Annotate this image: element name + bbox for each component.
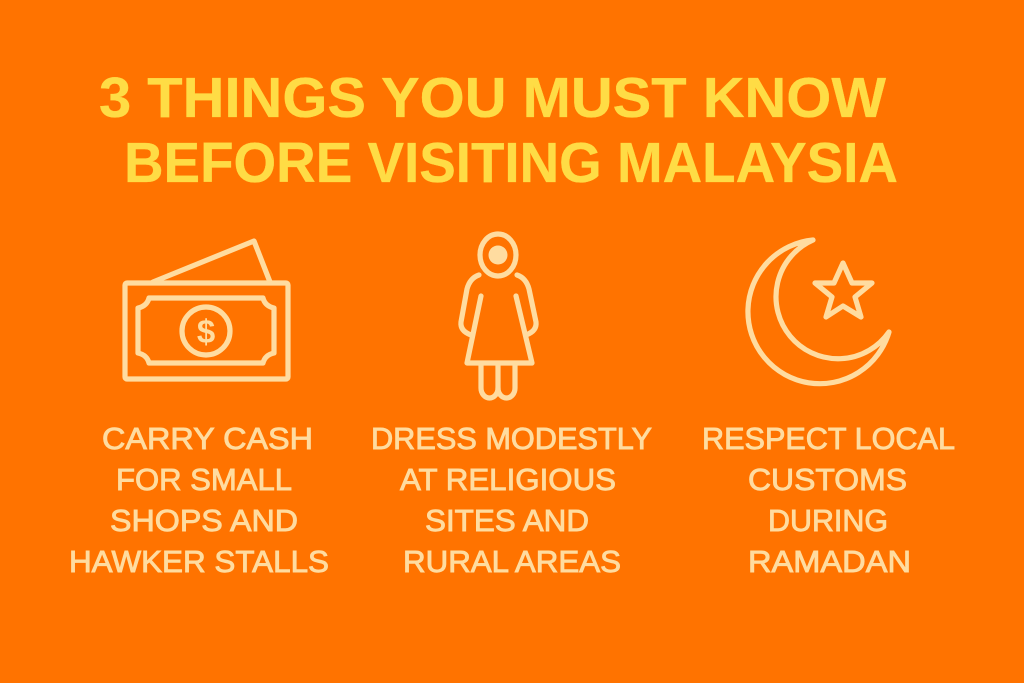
title [99, 66, 898, 195]
icon: crescent moon and star [748, 240, 889, 384]
text: dress modestly [371, 421, 652, 579]
title: BEFORE VISITING MALAYSIA [124, 131, 898, 195]
text: carry cash: HAWKER STALLS [69, 544, 329, 579]
text: respect customs: RAMADAN [748, 544, 911, 579]
title: 3 THINGS YOU MUST KNOW [99, 66, 886, 130]
icon: banknotes: $ [197, 313, 215, 350]
text: dress modestly: DRESS MODESTLY [371, 421, 652, 456]
text: respect customs: CUSTOMS [748, 462, 907, 497]
text: carry cash: CARRY CASH [102, 421, 313, 456]
text: carry cash [69, 421, 329, 579]
text: dress modestly: SITES AND [425, 503, 589, 538]
text: dress modestly: RURAL AREAS [403, 544, 621, 579]
text: respect customs [702, 421, 955, 579]
text: dress modestly: AT RELIGIOUS [400, 462, 616, 497]
icon: woman in modest dress and headscarf [461, 234, 536, 398]
text: carry cash: FOR SMALL [116, 462, 292, 497]
icon: banknotes [125, 241, 288, 379]
text: respect customs: RESPECT LOCAL [702, 421, 955, 456]
text: respect customs: DURING [768, 503, 888, 538]
text: carry cash: SHOPS AND [110, 503, 298, 538]
